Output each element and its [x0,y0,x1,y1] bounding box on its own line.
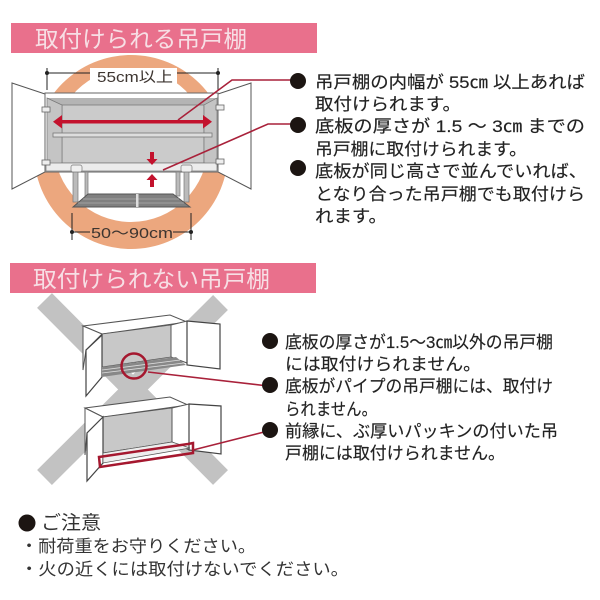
heading: mountable: 取付けられる吊戸棚 [35,26,247,52]
hinges [42,105,224,165]
icon: grey cross [44,300,220,478]
bottom dimension [70,213,193,242]
text block: mountable conditions: 底板が同じ高さで並んでいれば、 [315,162,587,181]
text block: mountable conditions: 底板の厚さが 1.5 ～ 3㎝ までの [315,117,585,136]
text block: cautions: ・火の近くには取付けないでください。 [20,560,349,579]
text block: mountable conditions: れます。 [315,207,387,226]
red width arrow [53,115,212,128]
text block: not mountable conditions: には取付けられません。 [285,355,481,374]
text block: cautions: ・耐荷重をお守りください。 [20,537,256,556]
text block: mountable conditions: 取付けられます。 [315,95,461,114]
left door [12,83,45,189]
right door [218,83,251,189]
rack legs [71,165,192,202]
orange ring [34,55,228,249]
rail [53,133,212,137]
text block: not mountable conditions: 底板がパイプの吊戸棚には、取付け [285,377,553,396]
heading: not mountable: 取付けられない吊戸棚 [33,266,270,292]
leader lines: not mountable [148,372,268,450]
top dimension [45,68,220,90]
text block: not mountable conditions: られません。 [285,400,377,419]
top dimension: 55cm以上 [97,69,173,86]
heading: not mountable [10,263,316,293]
bottom dimension: 50〜90cm [91,225,173,242]
text block: not mountable conditions: 前縁に、ぶ厚いパッキンの付いた吊 [285,422,558,441]
diagram: thick edge cabinet [85,397,221,481]
diagram: mountable cabinet [12,55,251,249]
text block: mountable conditions: となり合った吊戸棚でも取付けら [315,185,585,204]
red outline [99,443,193,467]
text block: mountable conditions: 吊戸棚の内幅が 55㎝ 以上あれば [315,73,585,92]
text block: cautions [18,512,349,579]
red thickness arrows [146,152,158,187]
rack shelf [73,194,190,207]
diagram: pipe shelf cabinet [83,315,220,396]
text block: not mountable conditions: 戸棚には取付けられません。 [285,444,505,463]
text block: not mountable conditions: 底板の厚さが1.5～3㎝以外の吊戸棚 [285,333,553,352]
text block: mountable conditions [290,73,587,226]
red circle [122,354,146,378]
cabinet body [45,93,218,172]
text block: cautions: ご注意 [41,512,101,534]
text block: not mountable conditions [262,333,558,463]
text block: mountable conditions: 吊戸棚に取付けられます。 [315,140,527,159]
leader lines: mountable [163,80,292,170]
heading: mountable [11,23,317,53]
